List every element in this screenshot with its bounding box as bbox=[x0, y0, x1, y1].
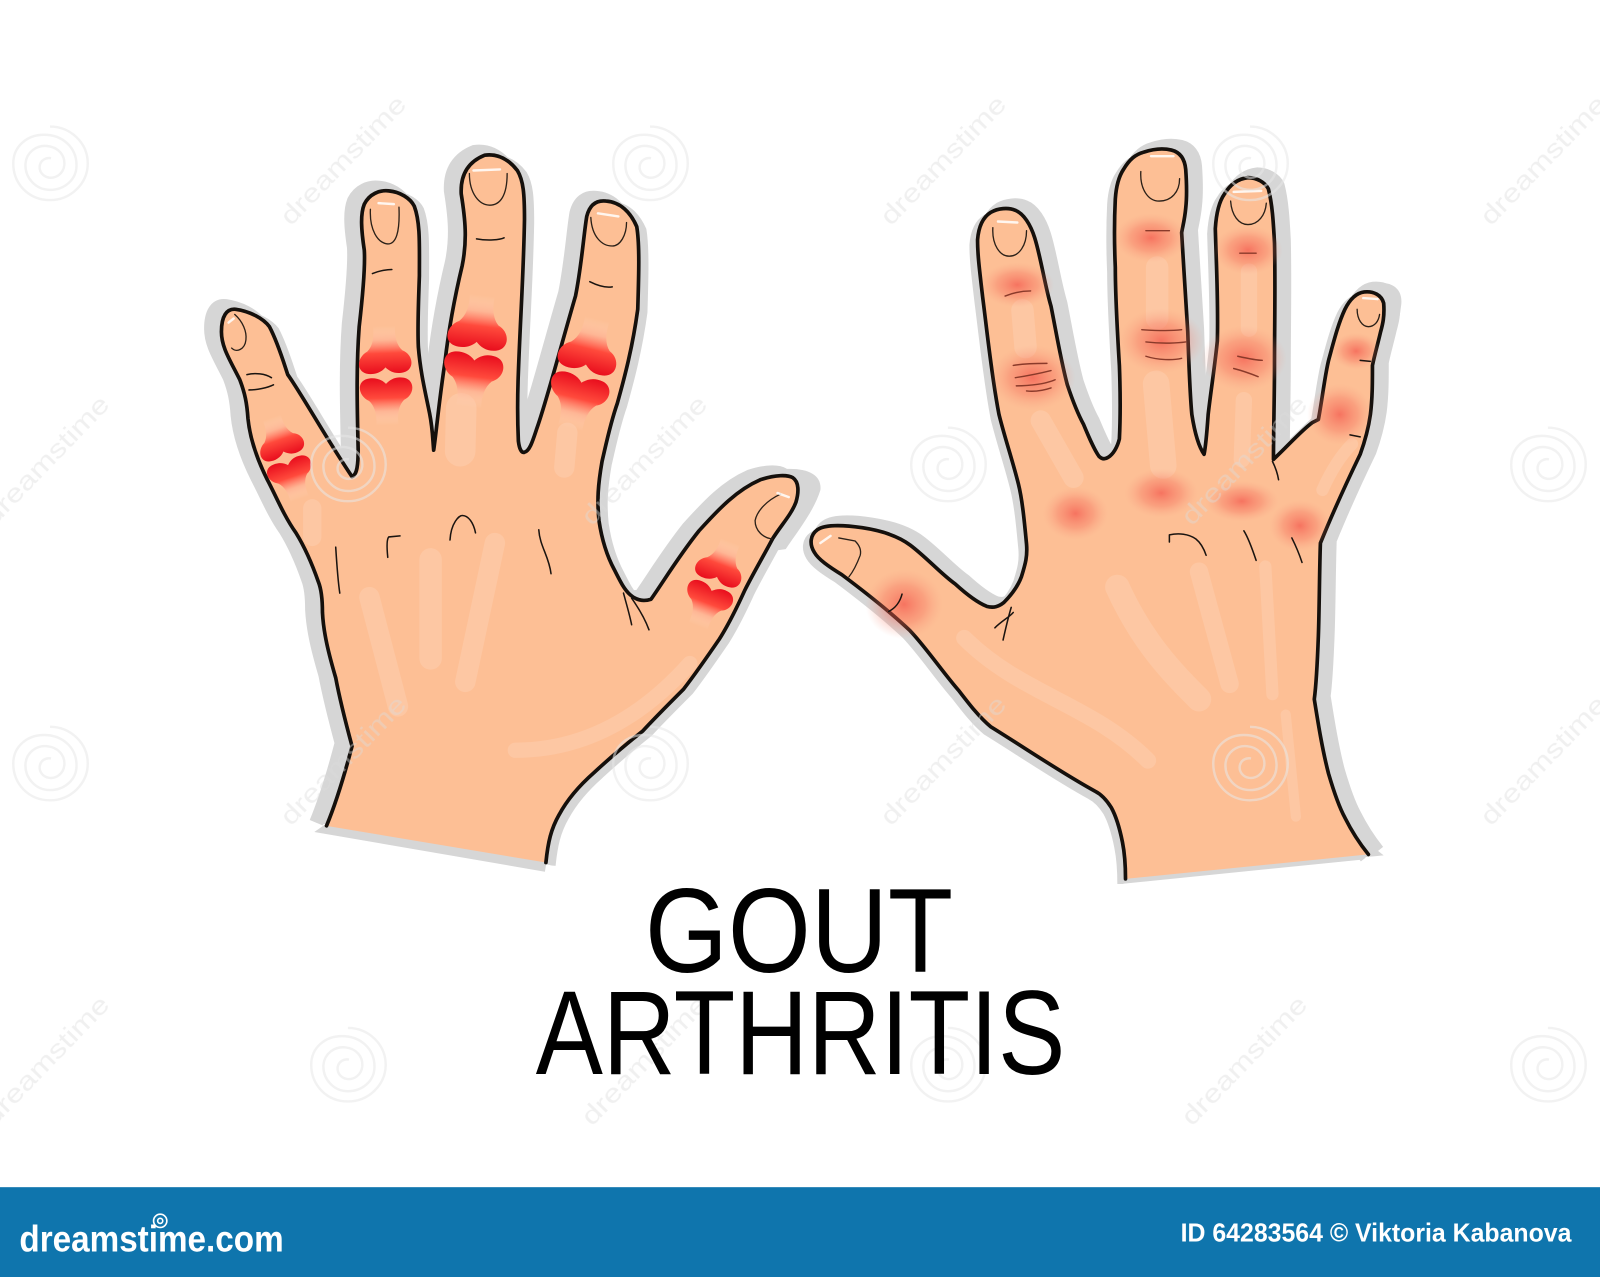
watermark text: dreamstime bbox=[875, 90, 1012, 231]
right hand creases bbox=[1005, 231, 1262, 391]
right hand with inflamed joints bbox=[806, 146, 1401, 884]
footer credit: ID 64283564 © Viktoria Kabanova bbox=[1181, 1219, 1572, 1247]
right hand nails bbox=[820, 156, 1380, 577]
joint: ring bbox=[541, 312, 626, 435]
watermark text: dreamstime bbox=[275, 690, 412, 831]
watermark spirals bbox=[13, 127, 1586, 1101]
footer bar bbox=[0, 1187, 1600, 1277]
left hand nails bbox=[229, 169, 789, 539]
left hand creases bbox=[247, 238, 649, 630]
right hand shadow bbox=[806, 146, 1401, 884]
title: GOUT bbox=[645, 865, 953, 998]
right hand pale bones bbox=[964, 267, 1352, 817]
watermark text: dreamstime bbox=[1475, 690, 1600, 831]
left hand silhouette bbox=[221, 155, 798, 863]
left hand shadow bbox=[211, 152, 821, 872]
right hand silhouette bbox=[811, 149, 1384, 879]
inflammation glows bbox=[865, 213, 1381, 639]
footer logo text: dreamstime.com bbox=[19, 1218, 284, 1259]
watermark text: dreamstime bbox=[275, 90, 412, 231]
right hand knuckle lines bbox=[889, 360, 1370, 640]
watermark text: dreamstime bbox=[875, 690, 1012, 831]
left hand pale bones bbox=[312, 408, 690, 750]
joint: middle bbox=[439, 292, 512, 411]
joint: index bbox=[358, 325, 414, 426]
title: ARTHRITIS bbox=[536, 967, 1065, 1100]
joint: thumb bbox=[676, 533, 753, 635]
left hand with bone joints bbox=[211, 152, 821, 872]
watermark text: dreamstime bbox=[576, 390, 713, 531]
joint: pinky bbox=[250, 410, 321, 506]
watermark text: dreamstime bbox=[1176, 390, 1313, 531]
footer logo spiral bbox=[154, 1214, 167, 1227]
watermark text: dreamstime bbox=[1475, 90, 1600, 231]
watermark text: dreamstime bbox=[1176, 991, 1313, 1131]
title bbox=[536, 865, 1065, 1100]
watermark text: dreamstime bbox=[576, 991, 713, 1131]
